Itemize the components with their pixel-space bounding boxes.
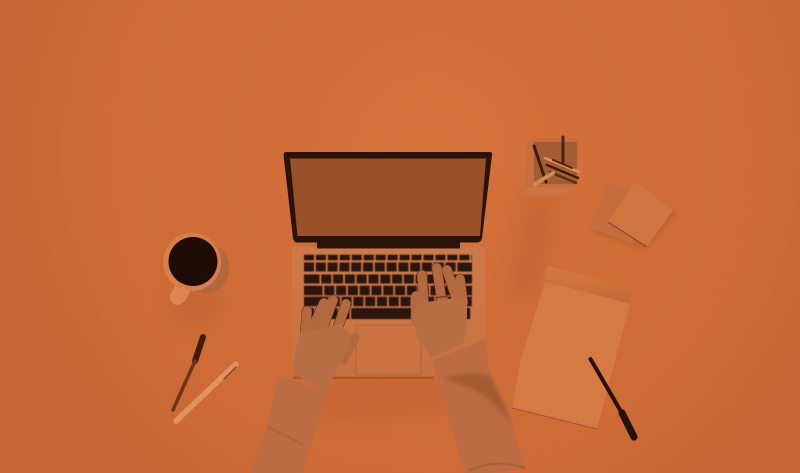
fingers [305,300,355,360]
coffee [168,237,218,286]
left hand [293,300,355,392]
laptop screen [290,158,486,236]
left sleeve [250,375,327,473]
finger shadows [422,268,463,307]
right hand [412,268,467,358]
light pen [176,364,236,421]
front note [608,182,673,247]
coffee cup [163,233,229,305]
ring [437,296,448,298]
pen holder [526,137,579,196]
laptop base [292,247,485,377]
laptop [284,152,492,379]
dark pen [173,337,203,410]
keyboard [304,258,472,314]
palm [412,296,467,358]
holder inside [534,142,577,184]
cup rim [163,233,221,291]
finger shadows [305,300,346,337]
fingers [416,268,463,320]
palm [293,324,352,392]
clips and pens [534,137,579,184]
sticky notes [589,182,676,249]
back note [589,182,633,244]
laptop lid [284,152,492,242]
holder body [526,139,579,196]
cup body [181,242,229,294]
cup handle [170,284,190,305]
notepad sheet [512,282,630,429]
right sleeve [432,340,525,473]
black pen [590,359,634,437]
trackpad [356,325,421,375]
notepad [512,266,635,429]
soft shadows on desk [175,195,560,415]
hinge [317,241,460,248]
notepad fold [544,266,635,304]
